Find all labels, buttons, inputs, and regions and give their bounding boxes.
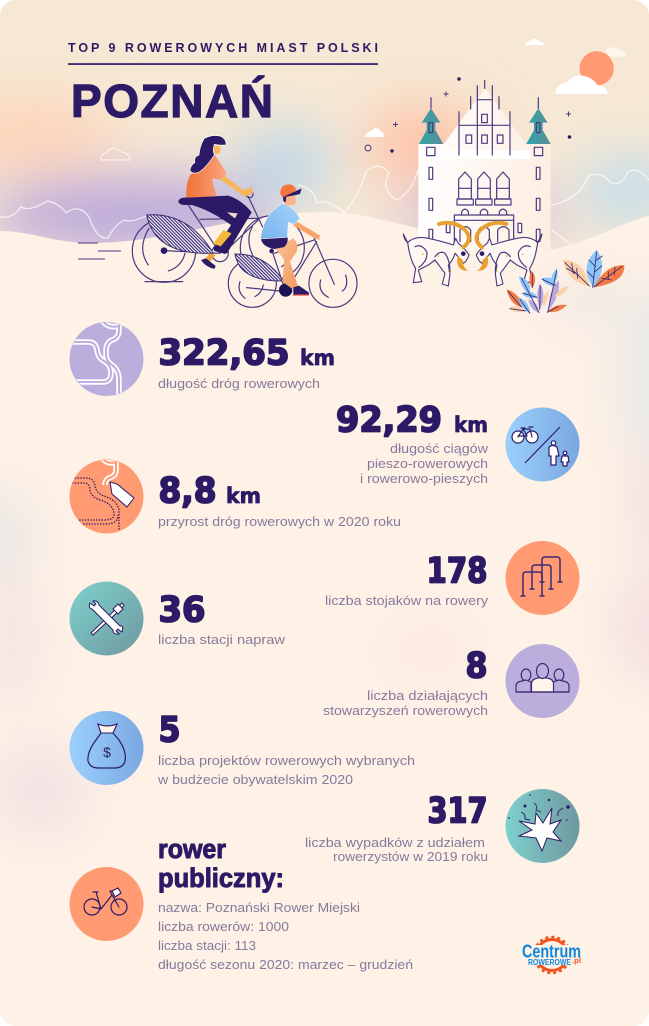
label: w budżecie obywatelskim 2020 — [157, 772, 353, 787]
icon: road network — [70, 320, 144, 398]
title: top 9: TOP 9 ROWEROWYCH MIAST POLSKI — [68, 41, 378, 55]
cyclists illustration — [132, 136, 357, 307]
icon: crayon drawing road — [70, 458, 144, 535]
label: liczba projektów rowerowych wybranych — [158, 753, 415, 768]
adult shirt — [186, 155, 227, 199]
logo: Centrum Rowerowe — [520, 937, 584, 973]
stat: road length — [70, 320, 335, 398]
label — [305, 835, 488, 864]
icon: impact burst — [506, 789, 580, 863]
stat: citizens budget — [70, 710, 415, 787]
icon: crossed tools — [70, 582, 144, 656]
squiggles — [0, 166, 649, 245]
adult rear shoe — [205, 253, 216, 262]
label: liczba stacji napraw — [158, 632, 286, 647]
unit: km — [226, 484, 261, 508]
number: 8 — [466, 646, 488, 686]
label: liczba wypadków z udziałem — [305, 835, 485, 850]
sparkles — [365, 77, 571, 153]
title rule — [68, 63, 378, 65]
icon: bike and pedestrians — [506, 408, 580, 482]
stat: road growth — [70, 458, 401, 535]
child legs — [275, 238, 298, 288]
plants — [507, 250, 624, 313]
icon: money bag: $ — [103, 744, 111, 760]
number: 36 — [158, 590, 206, 630]
outlined cloud — [101, 148, 130, 160]
adult face — [213, 146, 221, 154]
number: 5 — [158, 710, 180, 750]
label: liczba stojaków na rowery — [325, 593, 489, 608]
icon: city bike — [70, 867, 144, 941]
icon: bike racks — [506, 541, 580, 615]
details: liczba rowerów: 1000 — [158, 919, 289, 934]
speed lines — [78, 243, 121, 259]
goats — [403, 223, 542, 286]
label: długość dróg rowerowych — [158, 376, 320, 391]
label: przyrost dróg rowerowych w 2020 roku — [158, 514, 401, 529]
logo: Centrum Rowerowe: .pl — [572, 958, 581, 965]
stat: associations — [323, 644, 580, 718]
icon: money bag — [70, 711, 144, 785]
stat: repair stations — [70, 582, 286, 656]
details: nazwa: Poznański Rower Miejski — [158, 900, 360, 915]
decorative sky: sun and clouds — [525, 39, 627, 94]
icon: group of people — [506, 644, 580, 718]
adult hair — [190, 136, 226, 173]
label: liczba działających — [367, 688, 488, 703]
stat: accidents — [305, 789, 580, 864]
child arm — [293, 221, 320, 240]
public bike panel — [70, 834, 413, 972]
details: długość sezonu 2020: marzec – grudzień — [158, 957, 413, 972]
soft colour patches — [0, 278, 649, 840]
child bike — [228, 236, 357, 307]
hill — [0, 212, 649, 284]
number: 317 — [428, 792, 488, 832]
label: rowerzystów w 2019 roku — [333, 849, 488, 864]
heading: rower — [158, 834, 226, 864]
label — [360, 441, 489, 486]
details: liczba stacji: 113 — [158, 938, 256, 953]
title: city: POZNAŃ — [71, 75, 273, 127]
heading — [158, 834, 284, 893]
logo: Centrum Rowerowe: Centrum — [522, 942, 581, 962]
child shirt — [260, 203, 300, 239]
stat: bike racks — [325, 541, 580, 615]
castle illustration — [418, 80, 551, 250]
heading: publiczny: — [158, 863, 284, 893]
number: 8,8 — [158, 472, 216, 512]
number: 322,65 — [158, 334, 290, 374]
label: i rowerowo-pieszych — [360, 471, 488, 486]
child shorts — [261, 237, 288, 249]
unit: km — [300, 346, 335, 370]
label: pieszo-rowerowych — [367, 456, 488, 471]
stat: shared paths — [336, 400, 580, 486]
tower roofs — [419, 108, 443, 144]
label — [157, 753, 415, 787]
adult leaf panel — [147, 215, 213, 253]
label: długość ciągów — [390, 441, 489, 456]
unit: km — [454, 413, 488, 437]
label: stowarzyszeń rowerowych — [323, 703, 488, 718]
label — [323, 688, 488, 718]
details — [158, 900, 413, 972]
number: 178 — [426, 552, 488, 592]
number: 92,29 — [336, 400, 442, 440]
adult arm — [221, 176, 253, 197]
small cloud left of castle — [365, 128, 384, 137]
child head — [284, 194, 296, 205]
adult legs — [178, 196, 252, 252]
logo: Centrum Rowerowe: ROWEROWE — [528, 958, 572, 967]
adult bike — [132, 219, 196, 282]
